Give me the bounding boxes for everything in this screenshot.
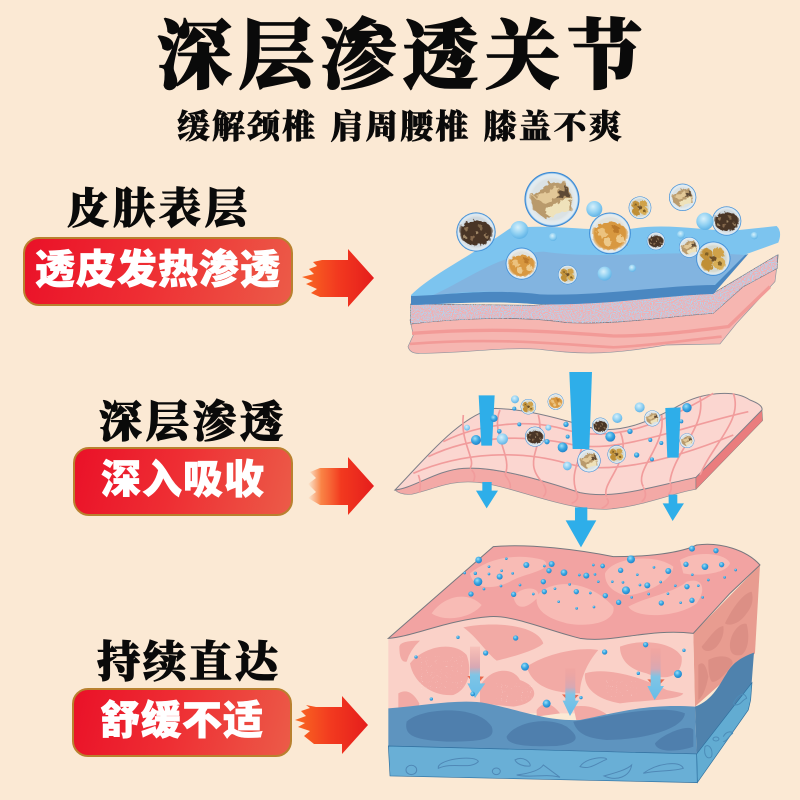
- top surface cells: [432, 554, 730, 625]
- top surface: [388, 544, 760, 639]
- dark blue band: [411, 254, 748, 305]
- blue droplets: [414, 546, 737, 708]
- heading: skin surface: 皮肤表层: [67, 187, 251, 233]
- subtitle: 缓解颈椎 肩周腰椎 膝盖不爽: [177, 110, 624, 146]
- bottom lighter layer: [388, 746, 697, 783]
- front face pink: [388, 617, 695, 713]
- blue arrows: [476, 372, 684, 547]
- side face blue layer: [695, 653, 754, 754]
- label: transdermal heat: [23, 237, 293, 306]
- bottom pink tissue: [408, 255, 778, 353]
- illustration: tissue block: [388, 544, 760, 783]
- white speckles: [420, 657, 637, 702]
- bottom squiggles: [406, 758, 683, 778]
- downward arrows: [467, 647, 665, 716]
- front cells: [398, 624, 683, 722]
- bubbles: [464, 394, 694, 472]
- label: deep absorption: 深入吸收: [101, 458, 265, 502]
- label: deep absorption: [73, 447, 293, 516]
- heading: deep penetration: 深层渗透: [99, 400, 287, 447]
- right side face: [693, 565, 760, 707]
- label: soothe discomfort: [72, 688, 292, 757]
- label: soothe discomfort: 舒缓不适: [100, 699, 264, 743]
- arrow: flame arrow 2: [308, 457, 374, 515]
- arrow: flame arrow 1: [302, 249, 374, 307]
- blue lower layer: [388, 702, 697, 754]
- sheet top surface: [395, 393, 762, 495]
- mid blue overlay: [433, 252, 745, 295]
- arrow: flame arrow 3: [295, 696, 368, 754]
- side face: [696, 410, 763, 489]
- bubbles: [456, 172, 758, 284]
- heading: sustained reach: 持续直达: [97, 640, 281, 687]
- illustration: mesh skin sheet with arrows: [395, 372, 763, 547]
- blue surface layer: [411, 226, 780, 305]
- sheet front edge: [395, 468, 696, 509]
- blue dark blobs: [406, 710, 693, 751]
- mesh lines: [413, 393, 748, 508]
- label: transdermal heat: 透皮发热渗透: [35, 248, 281, 292]
- illustration: skin layers with bubbles: [408, 172, 780, 353]
- side face blobs: [698, 592, 753, 700]
- speckled dermis layer: [411, 255, 777, 324]
- title: 深层渗透关节: [157, 16, 649, 99]
- side face lower layer: [697, 683, 752, 783]
